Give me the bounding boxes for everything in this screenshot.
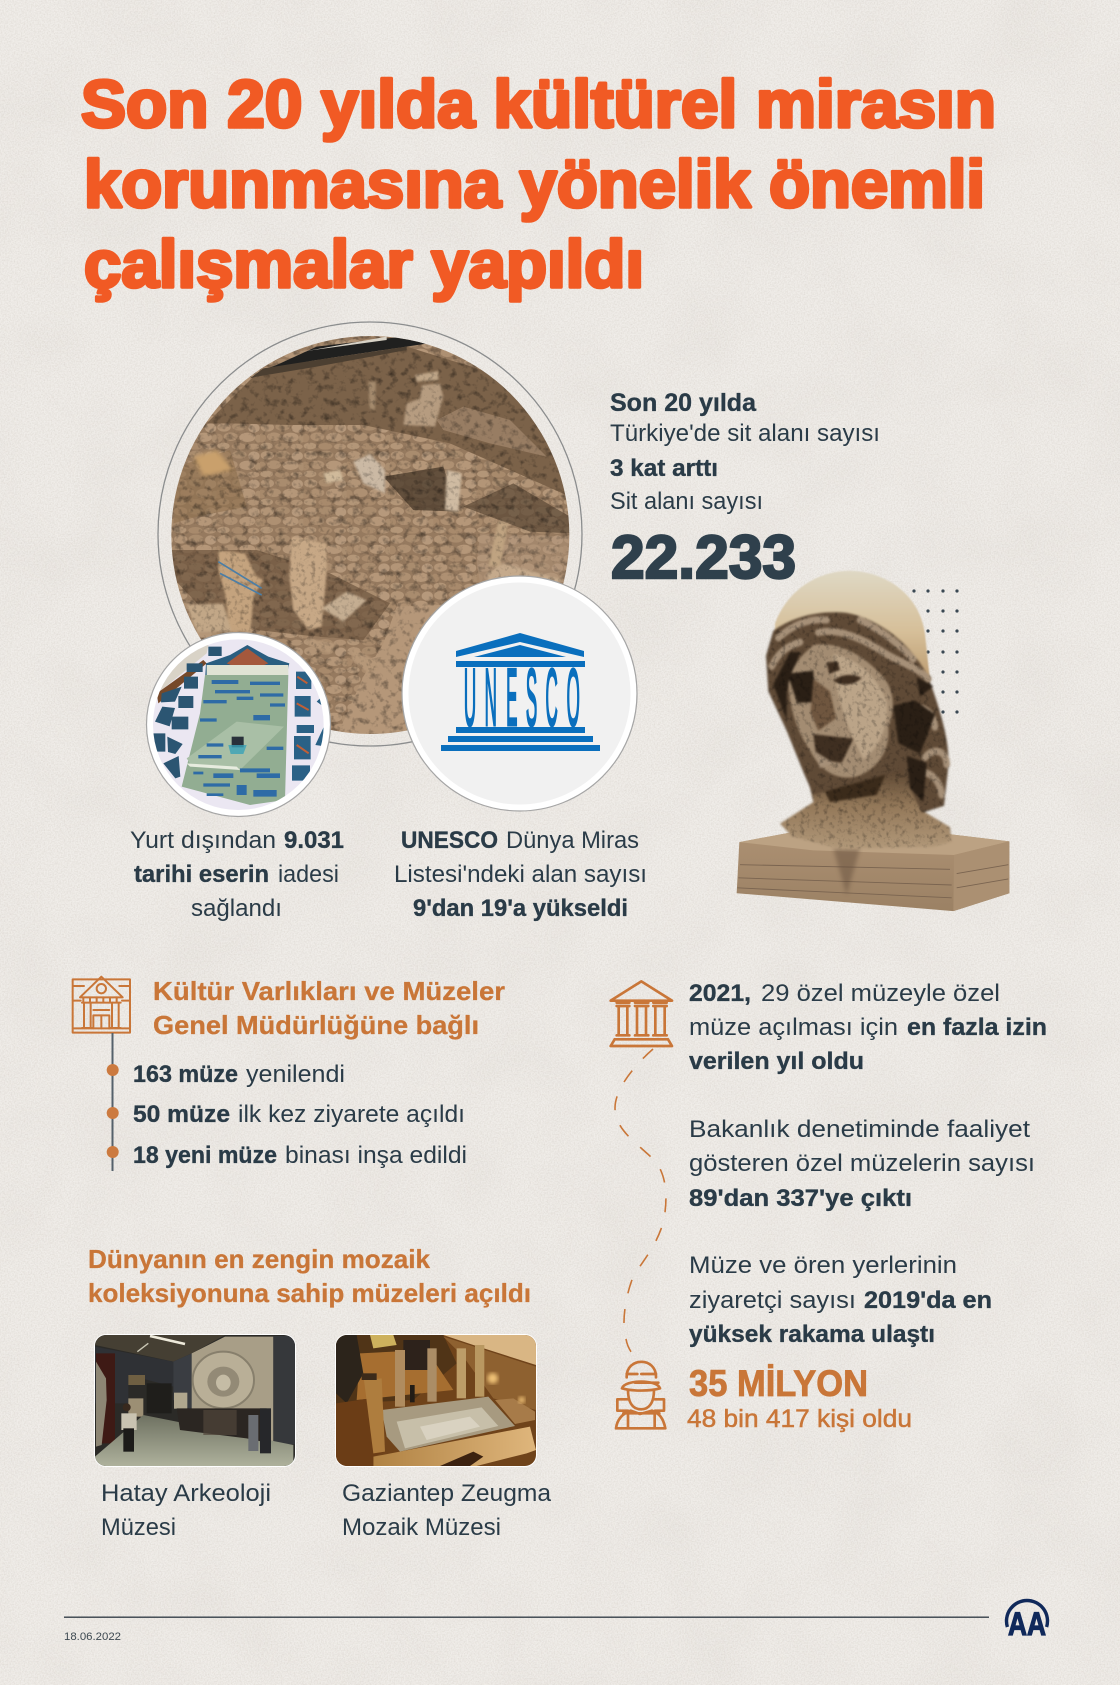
museum stats list: 18 yeni müze — [133, 1142, 277, 1169]
headdress dome — [775, 571, 930, 681]
title: çalışmalar yapıldı — [84, 227, 644, 302]
standing stones — [187, 371, 563, 675]
sit alanı stat block: Son 20 yılda — [610, 389, 757, 417]
caption: repatriated artifacts: Yurt dışından — [130, 827, 276, 854]
dotted square behind sculpture — [912, 589, 959, 714]
caption: UNESCO list: UNESCO — [401, 827, 498, 854]
big number 22.233: 22.233 — [611, 523, 796, 591]
caption: UNESCO list: Dünya Miras — [506, 827, 639, 854]
heading: Kültür Varlıkları: Genel Müdürlüğüne bağlı — [153, 1010, 479, 1040]
title — [81, 67, 996, 302]
icon: temple — [611, 981, 672, 1046]
dashed route line — [615, 1049, 666, 1360]
UNESCO circle — [402, 576, 637, 811]
mosaic circle photo — [146, 632, 330, 816]
visitor count stat — [687, 1363, 912, 1433]
photo: Hatay Arkeoloji Müzesi — [94, 1334, 296, 1467]
captions under mosaic photos: Mozaik Müzesi — [342, 1514, 501, 1541]
museum stats list: ilk kez ziyarete açıldı — [238, 1101, 465, 1128]
sit alanı stat block: Sit alanı sayısı — [610, 488, 763, 515]
wooden base — [737, 831, 1009, 911]
right column text block: müze açılması için — [689, 1014, 898, 1041]
right column text block: Bakanlık denetiminde faaliyet — [689, 1116, 1030, 1143]
caption: UNESCO list: 9'dan 19'a yükseldi — [413, 895, 628, 922]
caption: repatriated artifacts — [130, 827, 344, 922]
caption: repatriated artifacts: 9.031 — [284, 827, 344, 854]
right column text block: gösteren özel müzelerin sayısı — [689, 1150, 1035, 1177]
right column text block: yüksek rakama ulaştı — [689, 1321, 935, 1348]
caption: repatriated artifacts: iadesi — [278, 861, 339, 888]
heading: mosaic museums — [88, 1244, 531, 1308]
right column text block — [689, 980, 1047, 1348]
title: Son 20 yılda kültürel mirasın — [81, 67, 996, 142]
timeline with orange dots — [107, 1033, 119, 1171]
captions under mosaic photos: Müzesi — [101, 1514, 176, 1541]
photo: Gaziantep Zeugma Mozaik Müzesi — [335, 1334, 537, 1467]
right column text block: 2021, — [689, 980, 751, 1007]
museum stats list: 50 müze — [133, 1101, 230, 1128]
right column text block: 89'dan 337'ye çıktı — [689, 1185, 912, 1212]
sculpture: marble head on wooden base — [737, 571, 1009, 911]
heading: mosaic museums: Dünyanın en zengin mozaik — [88, 1244, 431, 1274]
museum stats list: binası inşa edildi — [285, 1142, 467, 1169]
title: korunmasına yönelik önemli — [84, 147, 985, 222]
captions under mosaic photos — [101, 1480, 552, 1541]
visitor count stat: 35 MİLYON — [689, 1363, 868, 1404]
right column text block: ziyaretçi sayısı — [689, 1287, 856, 1314]
footer line — [64, 1616, 989, 1618]
captions under mosaic photos: Gaziantep Zeugma — [342, 1480, 552, 1507]
marble head — [766, 612, 952, 849]
caption: repatriated artifacts: sağlandı — [191, 895, 282, 922]
museum stats list: yenilendi — [246, 1061, 345, 1088]
caption: UNESCO list — [394, 827, 647, 922]
caption: repatriated artifacts: tarihi eserin — [134, 861, 269, 888]
right column text block: 2019'da en — [864, 1287, 992, 1314]
sit alanı stat block — [610, 389, 880, 591]
heading: Kültür Varlıkları — [153, 976, 505, 1040]
captions under mosaic photos: Hatay Arkeoloji — [101, 1480, 271, 1507]
museum stats list — [133, 1061, 467, 1169]
heading: mosaic museums: koleksiyonuna sahip müzeleri açıldı — [88, 1278, 531, 1308]
right column text block: verilen yıl oldu — [689, 1048, 864, 1075]
heading: Kültür Varlıkları: Kültür Varlıkları ve Müzeler — [153, 976, 505, 1006]
UNESCO temple logo — [441, 633, 600, 751]
right column text block: 29 özel müzeyle özel — [761, 980, 1000, 1007]
sit alanı stat block: Türkiye'de sit alanı sayısı — [610, 420, 880, 447]
caption: UNESCO list: Listesi'ndeki alan sayısı — [394, 861, 647, 888]
museum stats list: 163 müze — [133, 1061, 238, 1088]
AA logo: AA — [1008, 1606, 1046, 1642]
icon: museum building — [73, 977, 130, 1033]
right column text block: en fazla izin — [907, 1014, 1047, 1041]
visitor count stat: 48 bin 417 kişi oldu — [687, 1405, 912, 1433]
right column text block: Müze ve ören yerlerinin — [689, 1252, 957, 1279]
date: 18.06.2022 — [64, 1631, 121, 1643]
UNESCO temple logo: UNESCO — [464, 653, 580, 743]
photo circle: Göbeklitepe excavation — [158, 322, 582, 747]
icon: tourist with hat and backpack — [616, 1362, 665, 1428]
sit alanı stat block: 3 kat arttı — [610, 455, 718, 482]
